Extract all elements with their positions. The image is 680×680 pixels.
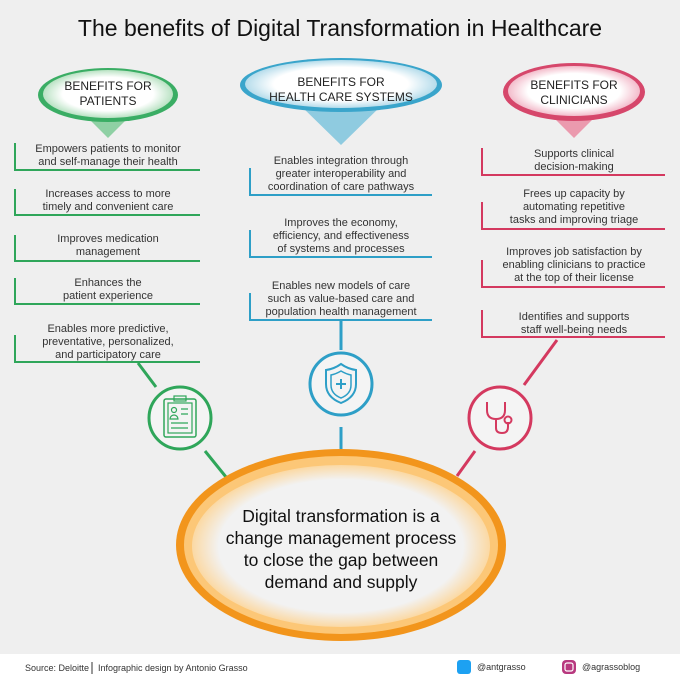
central ellipse: demand and supply	[265, 572, 418, 592]
patients list	[15, 143, 200, 362]
footer	[0, 654, 680, 680]
patients list: Increases access to more	[45, 188, 171, 200]
icon: clipboard	[149, 387, 211, 449]
central ellipse	[176, 449, 506, 641]
clinicians list: Supports clinical	[534, 148, 614, 160]
footer: Source: Deloitte	[25, 663, 89, 673]
clinicians list: at the top of their license	[514, 272, 634, 284]
header: health care systems: HEALTH CARE SYSTEMS	[269, 90, 413, 104]
clinicians list	[482, 148, 665, 337]
patients list: and participatory care	[55, 349, 161, 361]
clinicians list: automating repetitive	[523, 201, 625, 213]
systems list: of systems and processes	[277, 243, 405, 255]
systems list: coordination of care pathways	[268, 181, 415, 193]
patients list: Enhances the	[74, 277, 142, 289]
patients list: Enables more predictive,	[47, 323, 169, 335]
central ellipse: Digital transformation is a	[242, 506, 440, 526]
patients list: timely and convenient care	[43, 201, 173, 213]
systems list: population health management	[265, 306, 417, 318]
header: clinicians: CLINICIANS	[540, 93, 608, 107]
systems list: Improves the economy,	[284, 217, 398, 229]
icon: shield	[310, 353, 372, 415]
header: patients: PATIENTS	[80, 94, 136, 108]
systems list: efficiency, and effectiveness	[273, 230, 410, 242]
footer: @antgrasso	[477, 662, 526, 672]
systems list: such as value-based care and	[268, 293, 414, 305]
header: health care systems: BENEFITS FOR	[297, 75, 385, 89]
systems list: greater interoperability and	[276, 168, 406, 180]
footer: Infographic design by Antonio Grasso	[98, 663, 248, 673]
footer: @agrassoblog	[582, 662, 640, 672]
clinicians list: tasks and improving triage	[510, 214, 638, 226]
systems list: Enables integration through	[274, 155, 408, 167]
central ellipse: to close the gap between	[244, 550, 438, 570]
icon: stethoscope	[469, 387, 531, 449]
patients list: and self-manage their health	[38, 156, 178, 168]
clinicians list: Frees up capacity by	[523, 188, 625, 200]
patients list: management	[76, 246, 140, 258]
header: patients	[38, 68, 178, 138]
header: clinicians	[503, 63, 645, 138]
connectors	[138, 320, 557, 477]
clinicians list: enabling clinicians to practice	[502, 259, 646, 271]
patients list: Improves medication	[57, 233, 159, 245]
header: health care systems	[240, 58, 442, 145]
clinicians list: Identifies and supports	[519, 311, 630, 323]
central ellipse: change management process	[226, 528, 457, 548]
systems list	[250, 155, 432, 320]
title: The benefits of Digital Transformation in Healthcare	[78, 15, 602, 41]
clinicians list: Improves job satisfaction by	[506, 246, 642, 258]
systems list: Enables new models of care	[272, 280, 410, 292]
patients list: preventative, personalized,	[42, 336, 174, 348]
clinicians list: staff well-being needs	[521, 324, 628, 336]
header: patients: BENEFITS FOR	[64, 79, 152, 93]
patients list: patient experience	[63, 290, 153, 302]
header: clinicians: BENEFITS FOR	[530, 78, 618, 92]
patients list: Empowers patients to monitor	[35, 143, 181, 155]
clinicians list: decision-making	[534, 161, 614, 173]
